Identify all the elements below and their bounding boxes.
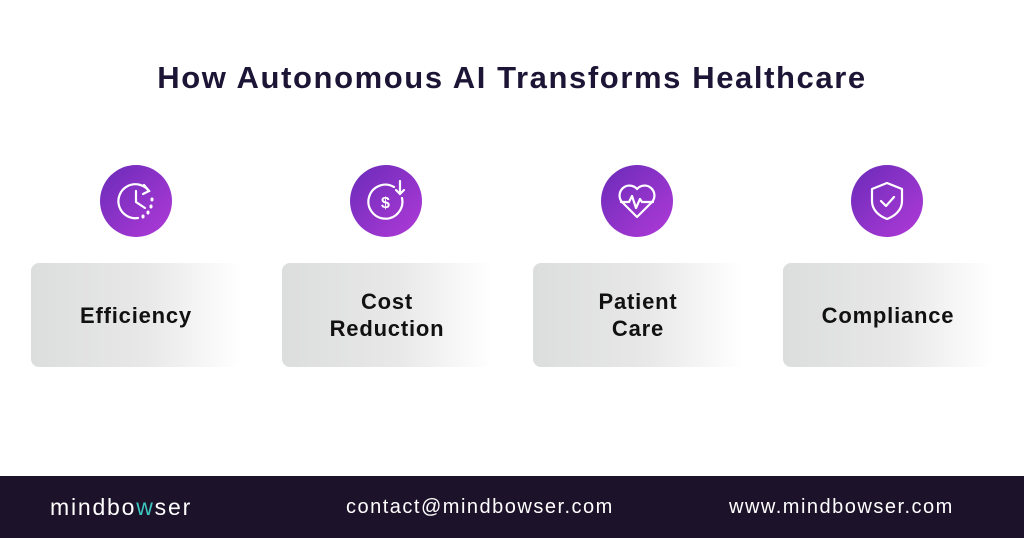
icon: shield — [851, 165, 923, 237]
card: cost reduction: Cost — [361, 289, 413, 314]
title: How Autonomous AI Transforms Healthcare — [157, 60, 867, 95]
card: patient care — [533, 263, 743, 367]
card: cost reduction — [282, 263, 492, 367]
icon: clock — [100, 165, 172, 237]
logo: mindbowser — [50, 494, 192, 520]
card: cost reduction: Reduction — [330, 316, 444, 341]
website: www.mindbowser.com — [729, 496, 954, 518]
card: compliance — [783, 263, 993, 367]
card: patient care: Patient — [599, 289, 677, 314]
card: patient care: Care — [612, 316, 664, 341]
footer — [0, 476, 1024, 538]
icon: cost — [350, 165, 422, 237]
card: compliance: Compliance — [822, 302, 954, 328]
card: efficiency — [31, 263, 241, 367]
icon: cost: $ — [381, 195, 390, 212]
icon: heart — [601, 165, 673, 237]
card: efficiency: Efficiency — [80, 302, 192, 328]
email: contact@mindbowser.com — [346, 496, 614, 518]
